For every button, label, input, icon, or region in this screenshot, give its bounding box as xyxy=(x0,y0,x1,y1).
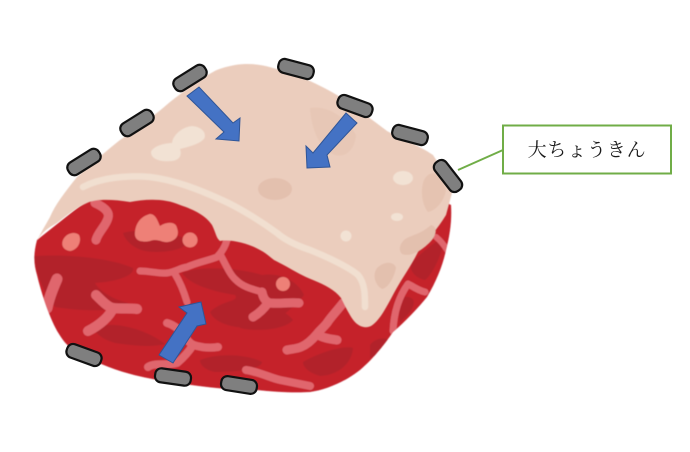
gray boundary dashes xyxy=(65,58,465,395)
pink fat veins xyxy=(47,203,447,386)
darker fat patches xyxy=(258,107,446,289)
dark muscle patches xyxy=(34,231,444,376)
label: large intestine muscle: 大ちょうきん xyxy=(528,139,646,161)
pale fat stripe xyxy=(83,176,365,307)
pale fat spots xyxy=(151,126,413,242)
fat cap xyxy=(37,64,452,327)
arrow: upper right, pointing down-left xyxy=(306,113,357,168)
leader line to label xyxy=(458,150,503,170)
label: large intestine muscle xyxy=(503,126,671,174)
arrow: lower, pointing up-right xyxy=(159,302,206,363)
pale marbling spots xyxy=(62,214,290,291)
red meat body xyxy=(34,190,451,392)
arrow: upper left, pointing down-right xyxy=(187,87,240,141)
diagram: cut of meat with muscle label xyxy=(34,58,672,395)
